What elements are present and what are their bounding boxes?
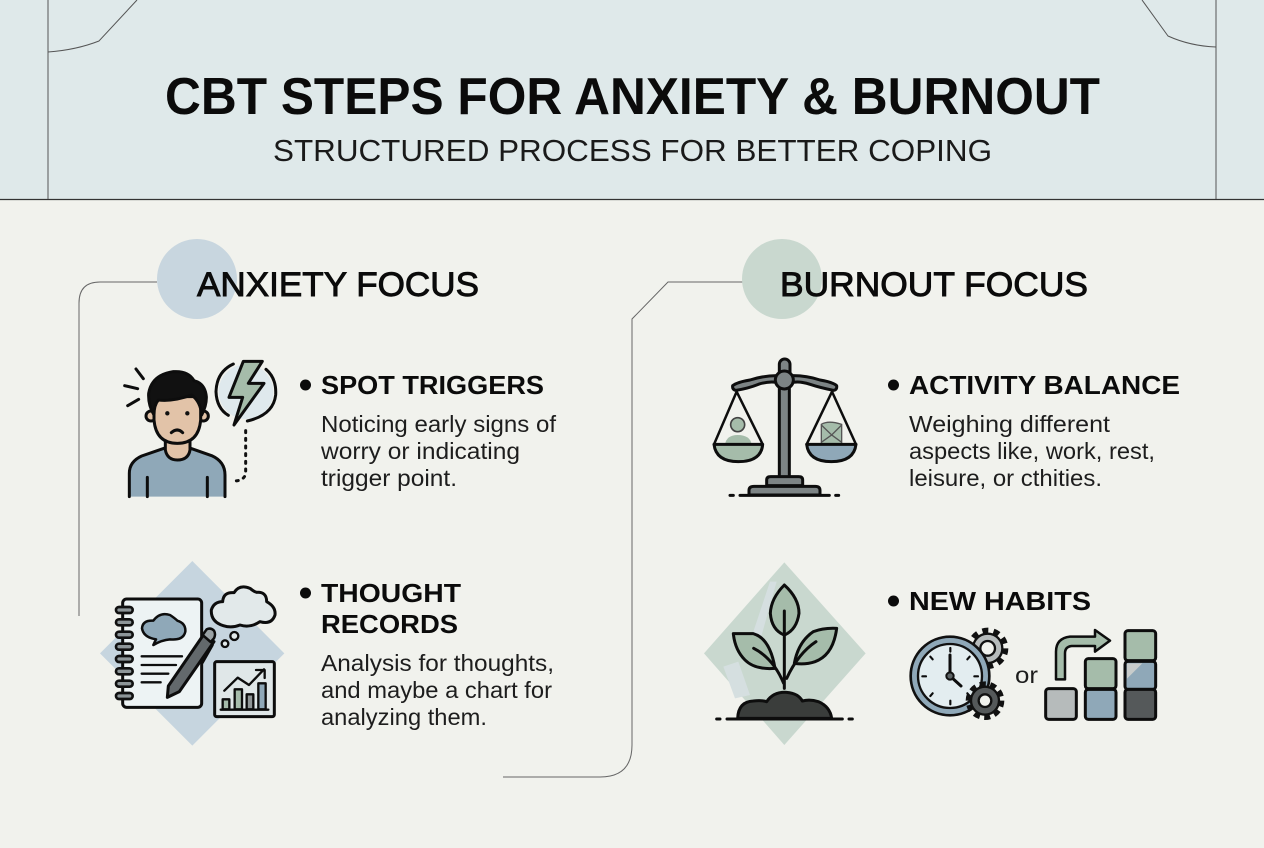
text: activity balance: leisure, or cthities. [909, 465, 1102, 491]
icon: stacked habit blocks with arrow [1046, 630, 1156, 719]
text: spot triggers: worry or indicating [320, 438, 520, 464]
connector: anxiety column [79, 282, 157, 616]
text: thought records: RECORDS [321, 609, 458, 639]
text: spot triggers: SPOT TRIGGERS [321, 370, 544, 400]
heading: burnout focus [742, 239, 1088, 319]
title: CBT STEPS FOR ANXIETY & BURNOUT [165, 68, 1100, 126]
header band [0, 0, 1264, 200]
heading: burnout focus: BURNOUT FOCUS [780, 266, 1088, 304]
icon: growing plant on diamond [704, 562, 866, 745]
text: activity balance: ACTIVITY BALANCE [909, 370, 1180, 400]
text: spot triggers [300, 370, 557, 491]
text: thought records: analyzing them. [321, 704, 487, 730]
text: thought records: THOUGHT [321, 578, 461, 608]
icon: worried person with lightning bolt [125, 361, 276, 497]
text: spot triggers: trigger point. [321, 465, 457, 491]
text: thought records: Analysis for thoughts, [321, 650, 554, 676]
text: activity balance: aspects like, work, rest, [909, 438, 1155, 464]
subtitle: STRUCTURED PROCESS FOR BETTER COPING [273, 133, 992, 168]
icon: balance scale [714, 359, 856, 495]
text: thought records: and maybe a chart for [321, 677, 552, 703]
connector: burnout column [503, 282, 743, 777]
text: activity balance [888, 370, 1180, 491]
text: activity balance: Weighing different [909, 411, 1111, 437]
label: or: or [1015, 662, 1038, 688]
heading: anxiety focus [157, 239, 479, 319]
text: spot triggers: Noticing early signs of [321, 411, 557, 437]
heading: anxiety focus: ANXIETY FOCUS [197, 266, 479, 304]
icon: clock with gears [911, 630, 1006, 717]
icon: notebook, thought cloud and chart on diamond [100, 561, 284, 746]
text: new habits: NEW HABITS [909, 586, 1091, 616]
text: thought records [300, 578, 554, 730]
